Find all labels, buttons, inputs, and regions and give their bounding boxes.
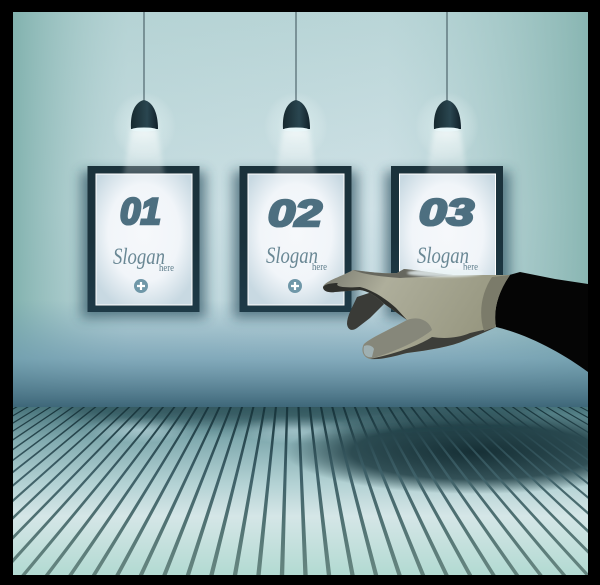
frame 1 — [81, 166, 206, 318]
hand shading: fingertip and underside — [323, 283, 407, 320]
here 1: here — [159, 263, 174, 274]
number 01: 01 — [120, 191, 161, 232]
hand shading: thumb lower — [370, 327, 496, 359]
here 2: here — [312, 262, 327, 273]
frame 2 — [233, 166, 358, 318]
lamp 3 — [415, 12, 479, 178]
slogan 3: Slogan — [417, 243, 469, 268]
glow on hand — [407, 269, 483, 277]
panel: wall — [13, 12, 588, 407]
hand body — [323, 269, 510, 359]
floor stripes — [13, 407, 588, 575]
frame 3 — [385, 166, 510, 318]
hand shading: top edge — [353, 269, 453, 278]
slogan 1: Slogan — [113, 244, 165, 269]
panel: floor — [13, 407, 588, 575]
hand pointing — [323, 269, 588, 372]
plus icon 1 — [134, 279, 148, 293]
sleeve — [495, 272, 588, 372]
number 02: 02 — [268, 193, 323, 234]
slogan 2: Slogan — [266, 243, 318, 268]
number 03: 03 — [419, 192, 475, 233]
plus icon 2 — [288, 279, 302, 293]
hand shading: thumb — [362, 318, 432, 359]
lamp 2 — [264, 12, 328, 178]
wrist shading — [481, 275, 510, 331]
here 3: here — [463, 262, 478, 273]
middle finger — [347, 292, 384, 330]
thumbnail — [364, 345, 374, 357]
lamp 1 — [112, 12, 176, 178]
